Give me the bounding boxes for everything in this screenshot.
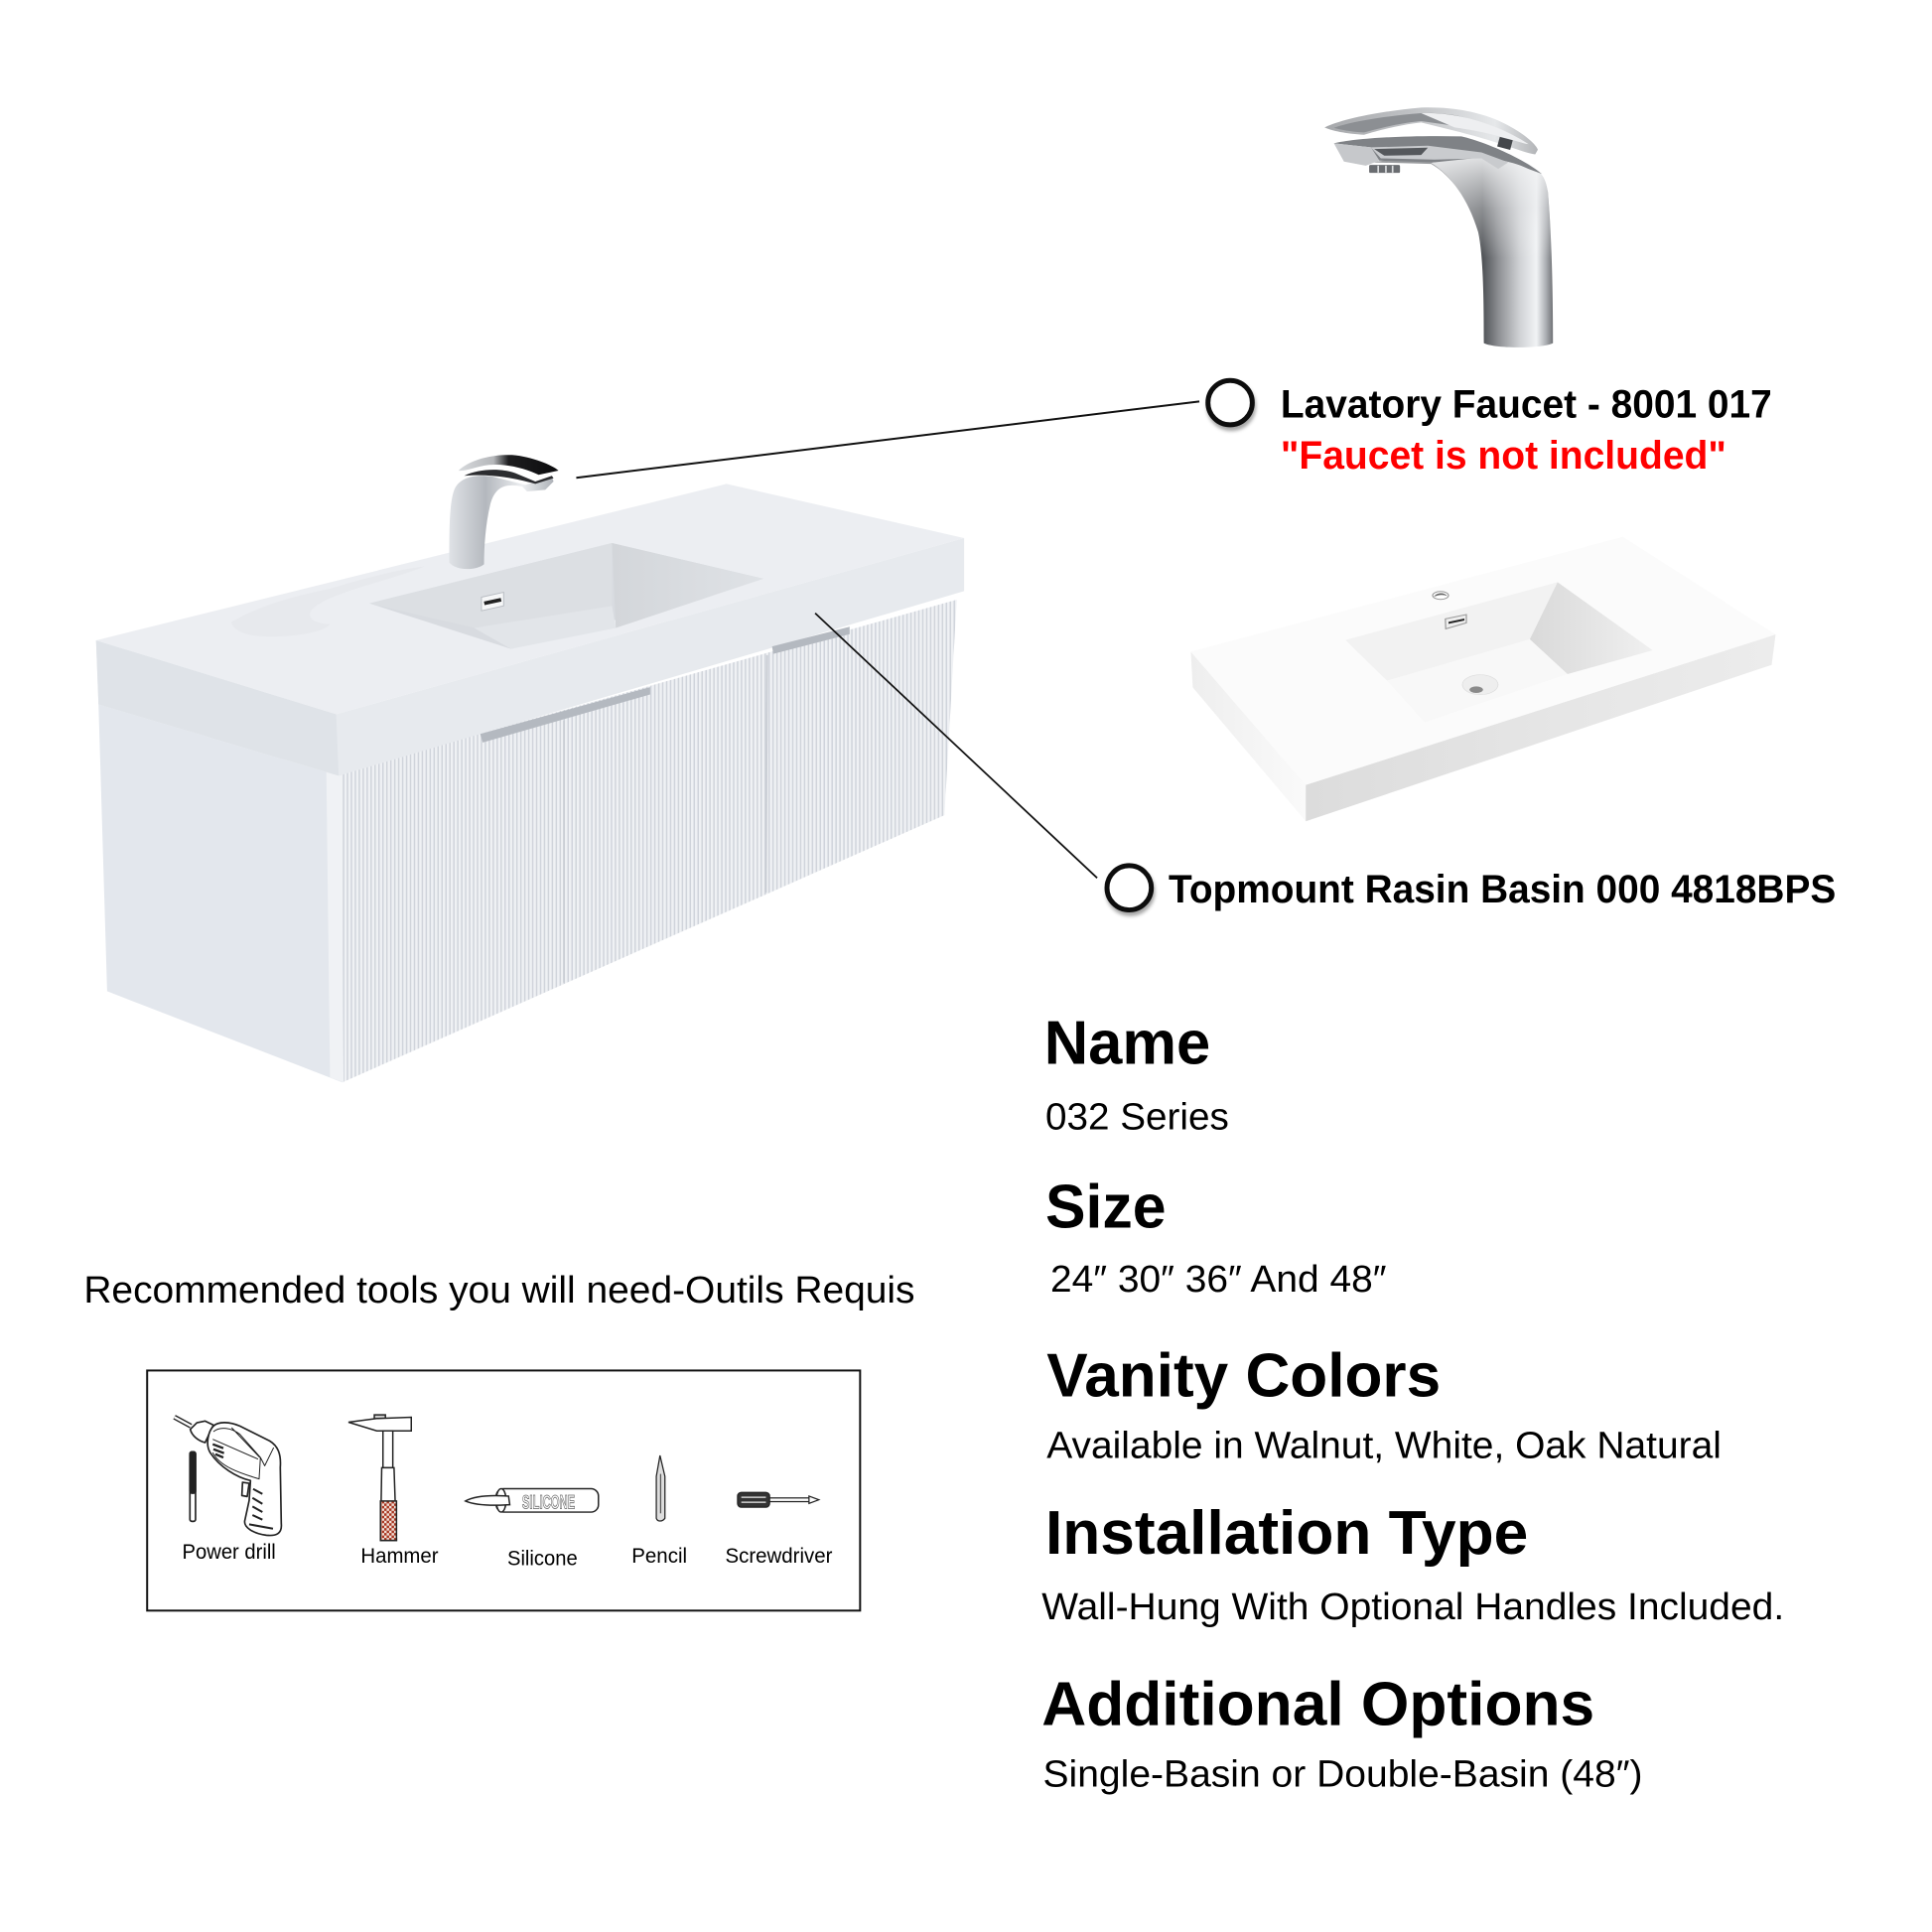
label: hammer: Hammer <box>360 1545 439 1568</box>
icon: callout circle basin <box>1107 866 1152 910</box>
icon: callout circle faucet <box>1208 380 1252 425</box>
spec: additional options heading: Additional Options <box>1041 1671 1594 1739</box>
icon: hammer <box>348 1415 411 1541</box>
aerator <box>1369 165 1400 173</box>
faucet body <box>1371 149 1553 347</box>
basin left side <box>1190 651 1306 821</box>
icon: pencil <box>656 1455 665 1521</box>
faucet hole <box>1433 592 1449 600</box>
soap recess <box>231 567 425 636</box>
spout nose <box>1334 143 1379 166</box>
small faucet <box>450 455 559 569</box>
cabinet side panel <box>98 704 343 1082</box>
countertop top surface <box>96 483 964 714</box>
spec: size heading: Size <box>1045 1173 1167 1242</box>
sink bowl <box>369 543 763 649</box>
icon: silicone tube <box>466 1488 599 1513</box>
spec: name heading: Name <box>1044 1010 1210 1078</box>
faucet label: Lavatory Faucet - 8001 017 <box>1281 382 1772 426</box>
icon: screwdriver <box>738 1492 819 1507</box>
drain <box>1462 675 1498 695</box>
label: silicone: Silicone <box>507 1547 578 1570</box>
spout top plate <box>1334 136 1542 174</box>
leader line to basin <box>815 614 1097 878</box>
door seams <box>564 655 767 983</box>
spec: vanity colors heading: Vanity Colors <box>1046 1341 1441 1410</box>
overflow <box>482 593 503 611</box>
icon: large chrome faucet <box>1324 107 1553 347</box>
basin label: Topmount Rasin Basin 000 4818BPS <box>1169 868 1836 911</box>
label: pencil: Pencil <box>631 1545 687 1568</box>
cabinet ribbed front <box>339 600 957 1082</box>
vanity product illustration <box>96 455 964 1082</box>
spec: installation value: Wall-Hung With Optional Handles Included. <box>1041 1586 1784 1628</box>
tools frame <box>147 1370 860 1610</box>
spec: size value: 24″ 30″ 36″ And 48″ <box>1050 1258 1387 1301</box>
overflow slot <box>1446 615 1466 628</box>
label: power drill: Power drill <box>183 1541 276 1564</box>
basin front edge <box>1306 634 1775 821</box>
spec: name value: 032 Series <box>1045 1095 1229 1138</box>
recommended tools heading: Recommended tools you will need-Outils Requis <box>83 1269 915 1311</box>
label: screwdriver: Screwdriver <box>726 1545 832 1568</box>
icon: silicone tube: SILICONE <box>522 1491 575 1513</box>
spec: additional options value: Single-Basin or Double-Basin (48″) <box>1043 1753 1643 1796</box>
corner highlight <box>327 770 344 1082</box>
basin top <box>1190 537 1775 785</box>
basin illustration <box>1190 537 1775 821</box>
handle hinge <box>1497 137 1513 150</box>
leader line to faucet <box>576 401 1199 478</box>
icon: power drill <box>175 1417 281 1536</box>
countertop front edge <box>96 538 964 775</box>
handles <box>481 687 650 743</box>
faucet not included note: "Faucet is not included" <box>1281 434 1726 478</box>
panel: tools <box>147 1370 860 1610</box>
spec: vanity colors value: Available in Walnut, White, Oak Natural <box>1046 1424 1722 1466</box>
faucet handle <box>1324 107 1538 154</box>
basin bowl <box>1345 582 1558 681</box>
spec: installation heading: Installation Type <box>1045 1499 1528 1568</box>
